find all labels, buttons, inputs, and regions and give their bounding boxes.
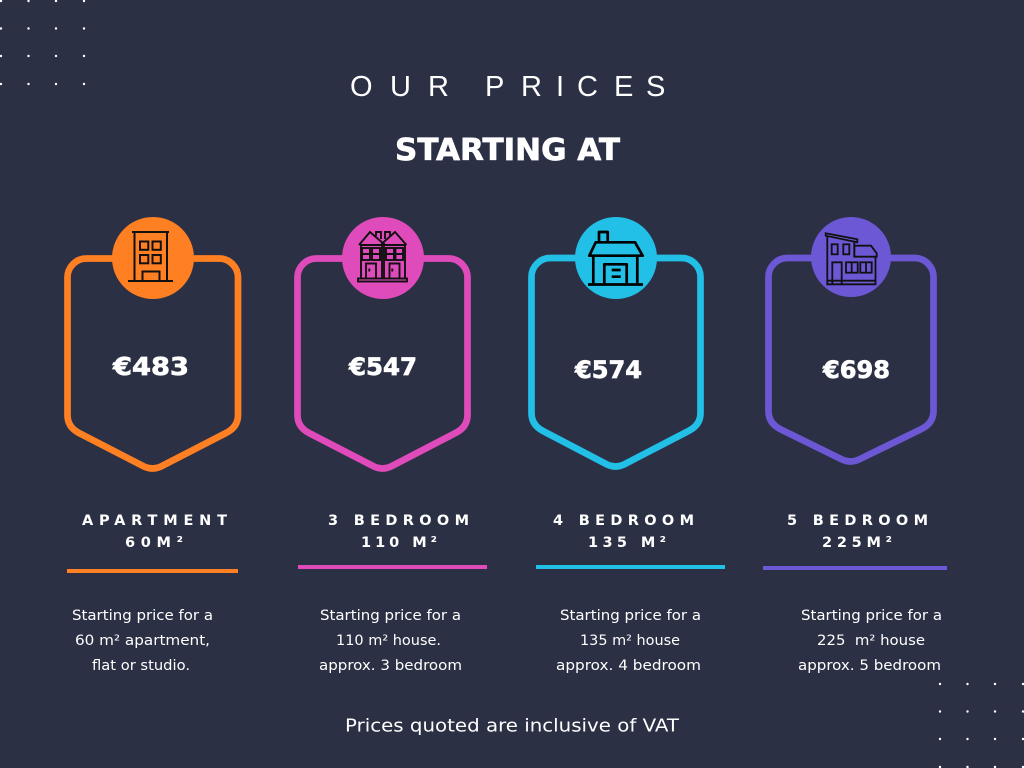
shield outline: 3 bedroom [297,258,468,468]
description: 3 bedroom: 110 m² house. [336,633,441,649]
label: 4 bedroom [553,513,694,551]
shield outline: 4 bedroom [531,258,701,466]
icon: modern house [811,217,891,297]
description: apartment: 60 m² apartment, [75,633,210,649]
icon: garage house [575,217,657,299]
label: 3 bedroom: 3 BEDROOM [328,513,469,529]
shield outline: 5 bedroom [768,258,934,462]
label: apartment: 60M² [125,535,183,551]
label: 3 bedroom: 110 M² [361,535,437,551]
underline: apartment [67,569,238,573]
description: 5 bedroom: Starting price for a [801,608,942,624]
label: 4 bedroom: 4 BEDROOM [553,513,694,529]
dot pattern: top left [0,0,85,85]
description: 4 bedroom [556,608,701,674]
underline: 5 bedroom [763,566,947,570]
subtitle: STARTING AT [395,133,621,168]
price: 5 bedroom: €698 [822,356,890,384]
description: 4 bedroom: 135 m² house [580,633,680,649]
description: 5 bedroom [798,608,942,674]
label: apartment [82,513,227,551]
title: OURPRICES [350,71,665,103]
description: 4 bedroom: approx. 4 bedroom [556,658,701,674]
price: apartment: €483 [112,352,189,381]
label: 3 bedroom [328,513,469,551]
underline: 4 bedroom [536,565,725,569]
description: 3 bedroom: approx. 3 bedroom [319,658,462,674]
dot pattern: bottom right [939,683,1024,768]
description: 5 bedroom: 225 m² house [817,633,925,649]
label: 5 bedroom [787,513,928,551]
label: apartment: APARTMENT [82,513,227,529]
description: apartment: Starting price for a [72,608,213,624]
panel: 5 bedroom [763,217,947,674]
icon: apartment building [112,217,194,299]
description: apartment [72,608,213,674]
panel: 3 bedroom [297,217,487,674]
footnote: Prices quoted are inclusive of VAT [345,716,680,736]
description: 4 bedroom: Starting price for a [560,608,701,624]
underline: 3 bedroom [298,565,487,569]
panel: 4 bedroom [531,217,725,674]
price: 3 bedroom: €547 [348,353,417,381]
shield outline: apartment [67,258,238,468]
price: 4 bedroom: €574 [574,356,642,384]
icon: terraced houses [342,217,424,299]
label: 4 bedroom: 135 M² [588,535,666,551]
description: apartment: flat or studio. [92,658,190,674]
description: 5 bedroom: approx. 5 bedroom [798,658,941,674]
panel: apartment [67,217,238,674]
description: 3 bedroom [319,608,462,674]
description: 3 bedroom: Starting price for a [320,608,461,624]
label: 5 bedroom: 5 BEDROOM [787,513,928,529]
label: 5 bedroom: 225M² [822,535,892,551]
